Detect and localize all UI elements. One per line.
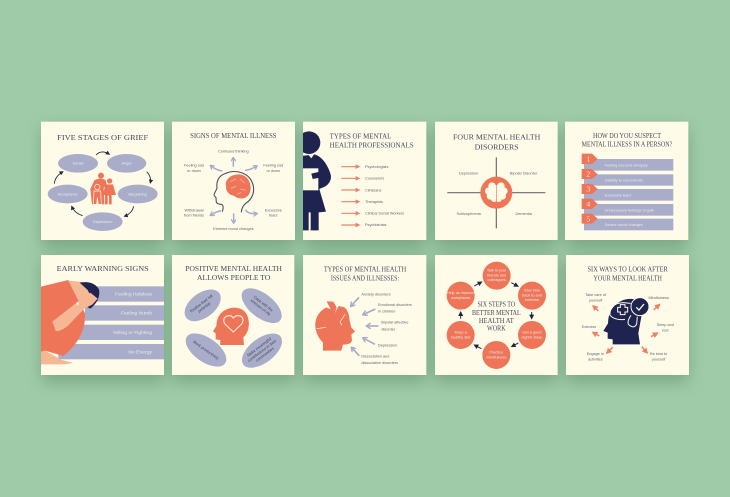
step labels: Keep a [455, 330, 468, 334]
step labels: Help us improve [447, 291, 474, 295]
issue labels: disorder [381, 327, 396, 331]
disorder labels: Depression [459, 171, 478, 175]
arrows [351, 297, 378, 356]
bar labels: Feeling sad and unhappy [605, 164, 648, 168]
step labels: mindfulness [486, 355, 507, 359]
sign labels: Excessive [265, 208, 282, 212]
stage labels: Depression [93, 220, 112, 224]
stage labels [58, 162, 147, 224]
sign labels: Extreme mood changes [213, 227, 254, 231]
way labels: rest [662, 328, 669, 332]
heading: issues and illnesses: TYPES OF MENTAL HEALTH [324, 265, 407, 274]
icon: head with heart [213, 308, 249, 345]
step labels: Practice [489, 350, 503, 354]
disorder labels: Schizophrenia [457, 212, 482, 216]
figure with clipboard [303, 131, 331, 230]
heading: professionals [330, 131, 414, 149]
bar labels [605, 164, 655, 227]
panel: positive mental health [172, 255, 294, 375]
icon: cracked head [315, 301, 355, 351]
ellipse labels [189, 294, 281, 367]
bar labels [113, 292, 152, 355]
disorder labels: Dementia [515, 212, 533, 216]
step labels: friends and [487, 273, 506, 277]
step labels: colleagues [488, 278, 506, 282]
ellipse labels: potential [197, 301, 211, 313]
list of professionals: Clinical Social Workers [365, 211, 404, 215]
figure: person holding head [38, 280, 99, 364]
way labels: Take care of [585, 293, 607, 297]
tag numbers: 3 [586, 185, 590, 194]
tag numbers [586, 154, 590, 223]
step labels: Talk to your [487, 269, 507, 273]
heading: positive mental health: ALLOWS PEOPLE TO [197, 273, 271, 282]
arrows [461, 282, 532, 349]
heading: six ways: YOUR MENTAL HEALTH [593, 273, 662, 282]
sign labels: Feeling sad [263, 164, 283, 168]
panel: five stages of grief [41, 122, 164, 240]
issue labels: Emotional disorders [378, 303, 412, 307]
cross axes [447, 157, 545, 228]
disorder labels: Bipolar Disorder [510, 171, 538, 175]
step labels: night's sleep [521, 335, 543, 339]
way labels [582, 293, 674, 361]
bars [584, 159, 673, 230]
stage labels: Anger [122, 162, 132, 166]
bar labels: No Energy [128, 349, 152, 355]
way labels: yourself [589, 298, 603, 302]
issue labels [361, 292, 412, 365]
bar labels: Inability to concentrate [605, 179, 643, 183]
sign labels [184, 149, 283, 231]
panel: types of mental health issues [303, 255, 426, 375]
ellipses [179, 282, 288, 375]
way labels: Mindfulness [648, 296, 669, 300]
panel: six steps to better mental health at work [435, 255, 558, 375]
center heading [472, 300, 521, 333]
bar labels: Feeling Helpless [115, 292, 152, 298]
way labels: Be kind to [650, 352, 667, 356]
heading: five stages of grief: FIVE STAGES OF GRIEF [57, 133, 148, 142]
heading: six ways [587, 264, 669, 282]
center heading: BETTER MENTAL [472, 308, 521, 317]
tag numbers: 2 [586, 170, 590, 179]
panel: how do you suspect mental illness [565, 122, 688, 240]
bar labels: Feeling Numb [121, 311, 152, 317]
center heading: WORK [487, 324, 506, 333]
list of professionals: Clinicians [365, 188, 381, 192]
step labels: back to and [522, 293, 542, 297]
center heading: SIX STEPS TO [477, 300, 516, 309]
sign labels: from friends [184, 214, 204, 218]
stage labels: Bargaining [129, 192, 147, 196]
stage ellipses [48, 154, 158, 231]
heading: professionals: TYPES OF MENTAL [330, 131, 392, 140]
tag numbers: 5 [586, 214, 590, 223]
heading: four disorders: FOUR MENTAL HEALTH [453, 132, 541, 141]
heading: suspect: MENTAL ILLNESS IN A PERSON? [582, 140, 673, 149]
step labels: healthy diet [451, 335, 471, 339]
icon: navy head with cross and check [603, 298, 649, 344]
heading: signs of mental illness: SIGNS OF MENTAL ILLNESS [190, 131, 276, 140]
tag numbers: 1 [586, 154, 590, 163]
step labels [447, 269, 543, 359]
way labels: Exercise [582, 325, 596, 329]
list of professionals: Psychiatrists [365, 223, 387, 227]
panel: six ways to look after your mental health [566, 255, 689, 375]
list of professionals: Counselors [365, 177, 384, 181]
stage labels: Acceptance [58, 192, 78, 196]
heading: suspect: HOW DO YOU SUSPECT [593, 131, 661, 140]
cycle arrows [54, 152, 151, 216]
head outline with brain [214, 171, 254, 212]
sign labels: Withdrawal [185, 208, 204, 212]
heading: four disorders [453, 132, 541, 151]
heading: early warning signs: EARLY WARNING SIGNS [57, 264, 149, 273]
list of professionals: Therapists [365, 200, 383, 204]
sign labels: fears [269, 214, 278, 218]
sign labels: Confused thinking [218, 149, 249, 153]
sign labels: or down [187, 169, 201, 173]
icon: family [90, 173, 116, 204]
disorder labels [457, 171, 538, 216]
center heading: HEALTH AT [479, 316, 514, 325]
panel: four mental health disorders [435, 122, 558, 240]
ellipse labels: stresses of life [249, 298, 271, 317]
ellipse labels: Work productively [192, 340, 219, 361]
number tags [582, 154, 598, 224]
way labels: yourself [652, 357, 666, 361]
way labels: Sleep and [657, 323, 674, 327]
arrows [211, 158, 256, 222]
heading: issues and illnesses [324, 265, 407, 282]
ellipse labels: Cope with the [253, 295, 274, 313]
ellipse labels: contributions to their [247, 339, 278, 363]
arrows [341, 167, 359, 225]
step labels: workplaces [451, 296, 470, 300]
heading: issues and illnesses: ISSUES AND ILLNESSES: [331, 273, 399, 282]
step labels: exercise [525, 298, 539, 302]
issue labels: in children [378, 309, 395, 313]
stage labels: Denial [73, 162, 84, 166]
heading: suspect [582, 131, 673, 149]
panel: early warning signs [38, 255, 164, 375]
bar labels: Unnecessary feelings of guilt [605, 208, 655, 212]
issue labels: dissociative disorders [361, 361, 398, 365]
icon: brain in circle [480, 177, 512, 209]
bars [58, 286, 164, 359]
tag numbers: 4 [586, 199, 590, 208]
ellipse labels: Realize their full [189, 294, 214, 314]
sign labels: Feeling sad [184, 164, 204, 168]
bar labels: Yelling or Fighting [113, 330, 152, 336]
bar labels: Excessive fears [605, 193, 632, 197]
issue labels: Depression [378, 343, 397, 347]
bar labels: Severe mood changes [605, 223, 643, 227]
panel: signs of mental illness [172, 122, 295, 240]
step circles [447, 262, 546, 369]
step labels: Give time [524, 289, 540, 293]
heading: positive mental health [185, 264, 282, 282]
heading: professionals: HEALTH PROFESSIONALS [330, 140, 414, 149]
ellipse labels: communities [255, 347, 275, 363]
way labels: activities [588, 357, 603, 361]
ellipse labels: Make meaningful [247, 337, 272, 358]
list of professionals [365, 165, 404, 227]
panel: types of mental health professionals [296, 122, 426, 240]
list of professionals: Psychologists [365, 165, 388, 169]
sign labels: or down [267, 169, 280, 173]
heading: four disorders: DISORDERS [475, 142, 519, 151]
way labels: Engage in [587, 352, 604, 356]
issue labels: Bipolar affective [381, 321, 408, 325]
heading: six ways: SIX WAYS TO LOOK AFTER [587, 264, 669, 273]
heading: positive mental health: POSITIVE MENTAL HEALTH [185, 264, 282, 273]
issue labels: Dissociation and [361, 355, 389, 359]
step labels: Get a good [523, 330, 541, 334]
arrows [593, 304, 660, 353]
issue labels: Anxiety disorders [361, 292, 391, 296]
